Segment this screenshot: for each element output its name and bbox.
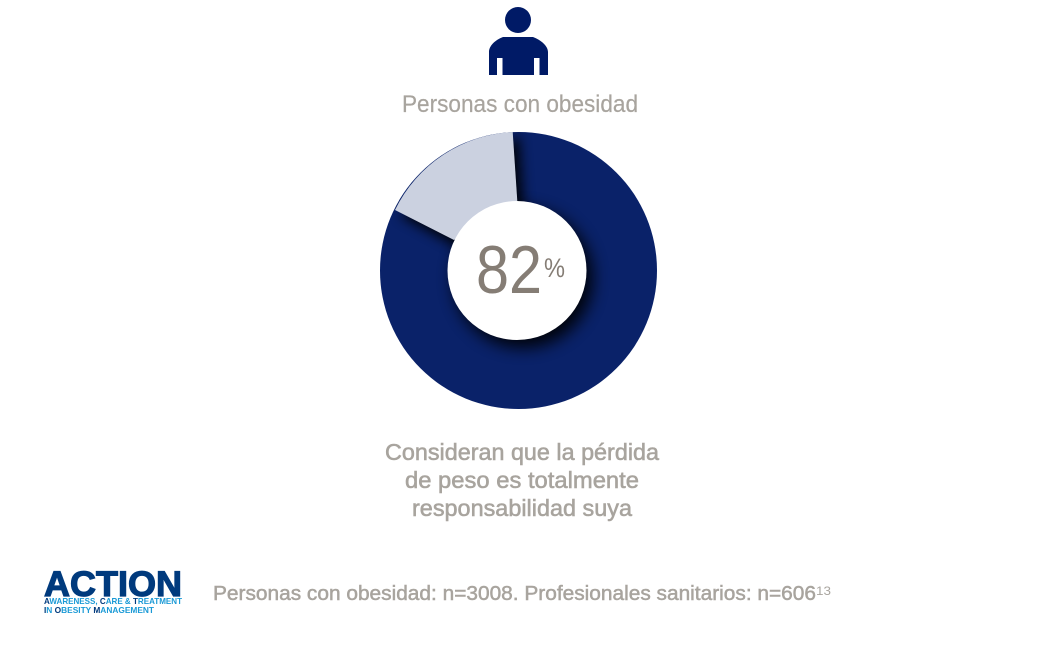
text block: description [385,439,659,521]
logo: ACTION: AWARENESS, CARE & TREATMENT [44,597,182,606]
segment: 82% navy [380,132,657,409]
text block: description: Consideran que la pérdida [385,439,659,465]
donut chart: 82% [380,132,657,409]
value: 82%: 82 [476,232,542,308]
footnote: sample sizes: Personas con obesidad: n=3008. Profesionales sanitarios: n=606 [213,583,816,605]
text block: description: responsabilidad suya [412,495,632,521]
segment: 18% light [395,132,517,240]
heading: personas con obesidad: Personas con obesidad [402,91,638,118]
footnote reference: 13 [816,584,831,598]
logo: ACTION: ACTION [44,565,182,604]
text block: description: de peso es totalmente [405,467,639,493]
centre circle [448,201,586,340]
infographic canvas [44,7,830,613]
icon: person [489,7,548,75]
value: 82%: % [544,253,565,283]
logo: ACTION: IN OBESITY MANAGEMENT [44,606,154,615]
